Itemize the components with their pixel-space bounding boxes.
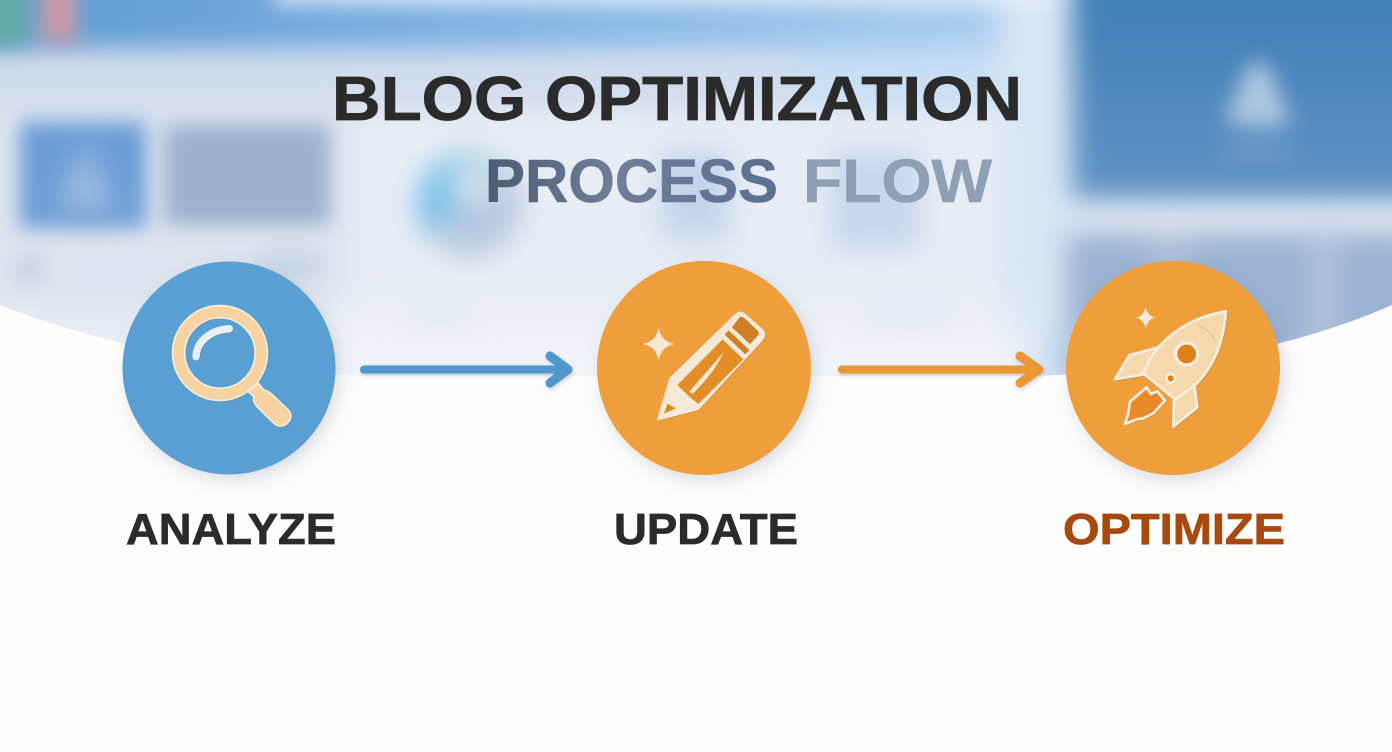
blue circle — [122, 262, 336, 474]
sparkle — [643, 327, 674, 361]
orange circle — [1066, 261, 1280, 475]
step 3: optimize — [1063, 261, 1285, 554]
pencil — [658, 312, 765, 420]
step 2: update — [597, 261, 811, 554]
icon: rocket with star — [1115, 307, 1226, 427]
label: optimize: OPTIMIZE — [1063, 505, 1285, 554]
blurred dashboard screenshot background — [0, 0, 1392, 376]
star — [1136, 307, 1155, 329]
arrow: update to optimize — [842, 356, 1039, 383]
step 1: analyze — [122, 262, 336, 554]
icon: magnifying glass — [179, 312, 291, 426]
title line 1: BLOG OPTIMIZATION — [332, 65, 1022, 134]
title — [332, 65, 1022, 215]
title line 2: FLOW — [803, 147, 992, 215]
orange circle — [597, 261, 811, 475]
arrow: analyze to update — [364, 356, 568, 383]
infographic canvas — [0, 0, 1392, 545]
icon: pencil with sparkle — [643, 312, 765, 420]
label: analyze: ANALYZE — [126, 505, 336, 554]
title line 2: PROCESS — [485, 147, 778, 215]
label: update: UPDATE — [614, 505, 798, 554]
title line 2 — [485, 147, 992, 215]
rocket — [1115, 311, 1226, 427]
